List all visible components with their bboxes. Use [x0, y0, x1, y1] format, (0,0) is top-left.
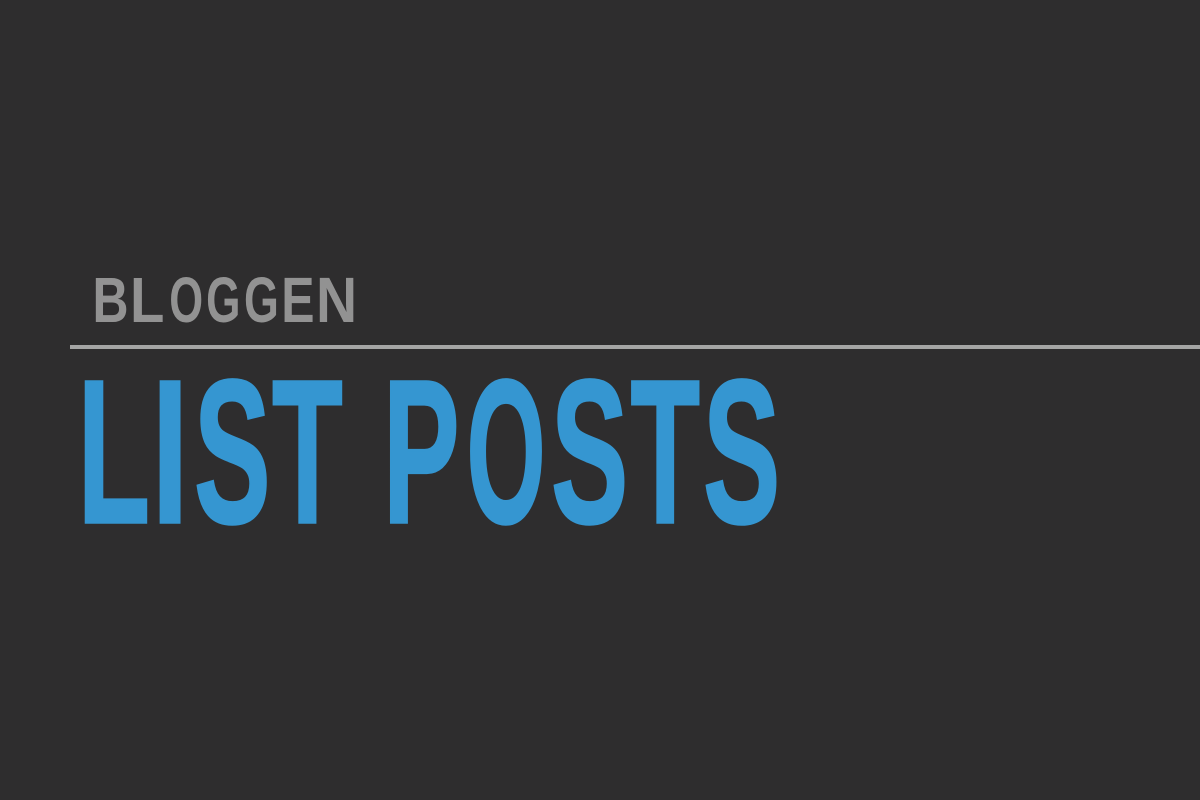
subtitle: BLOGGEN: O [169, 264, 203, 336]
subtitle: BLOGGEN [92, 264, 357, 336]
title: LIST POSTS: S [703, 338, 780, 567]
title: LIST POSTS: I [152, 337, 189, 566]
subtitle: BLOGGEN: G [206, 264, 240, 336]
title: LIST POSTS: P [383, 339, 460, 567]
divider line [70, 345, 1200, 349]
subtitle: BLOGGEN: B [92, 265, 129, 336]
title: LIST POSTS: T [630, 338, 700, 567]
title: LIST POSTS [78, 337, 780, 567]
subtitle: BLOGGEN: L [130, 264, 164, 336]
subtitle: BLOGGEN: N [316, 264, 357, 336]
title: LIST POSTS: L [78, 337, 150, 567]
title: LIST POSTS: T [272, 338, 343, 567]
title: LIST POSTS: S [194, 339, 271, 567]
subtitle: BLOGGEN: E [281, 265, 315, 336]
title: LIST POSTS: S [551, 338, 628, 567]
title: LIST POSTS: O [466, 339, 546, 567]
subtitle: BLOGGEN: G [244, 264, 279, 336]
